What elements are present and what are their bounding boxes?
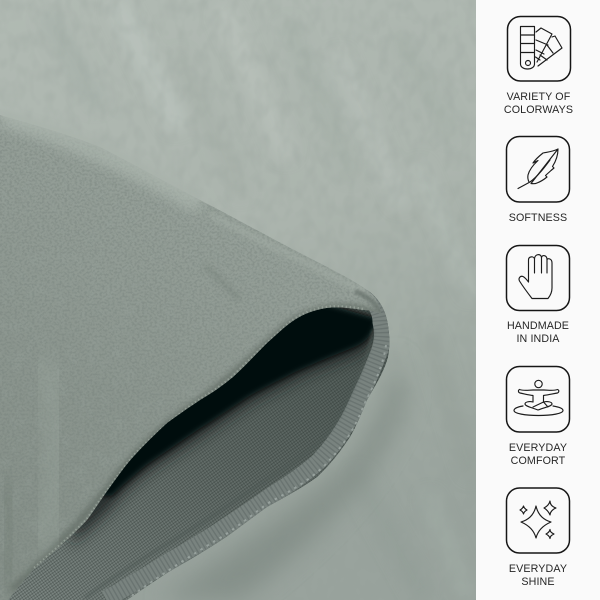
floor shadow beneath the roll — [178, 372, 411, 600]
icon: feather — [506, 136, 570, 202]
feature: handmade in india — [506, 246, 570, 345]
lip shadow along the opening — [12, 307, 378, 590]
fuzzy lip fringe — [33, 306, 363, 569]
label: softness: SOFTNESS — [509, 212, 567, 224]
icon: sparkling stars — [506, 488, 570, 553]
rolled rug top surface — [0, 110, 385, 600]
icon: colour swatch fan — [508, 16, 570, 81]
icon: raised hand — [506, 246, 570, 310]
feature: everyday shine — [506, 488, 570, 588]
dark opening shadow — [70, 300, 376, 545]
soft highlight along the top edge — [0, 118, 200, 206]
feature: variety of colorways — [504, 16, 573, 116]
label: handmade in india: IN INDIA — [516, 333, 560, 345]
label: variety of colorways: COLORWAYS — [504, 104, 573, 116]
label: everyday shine: EVERYDAY — [509, 563, 567, 575]
floor mottled streaks — [120, 14, 178, 121]
hem band — [106, 296, 382, 599]
rug floor background — [0, 0, 476, 600]
label: everyday comfort: COMFORT — [511, 455, 566, 467]
rolled rug underside with hem — [0, 285, 400, 600]
broad tonal patches — [42, 380, 59, 532]
label: handmade in india: HANDMADE — [507, 320, 569, 332]
label: variety of colorways: VARIETY OF — [507, 91, 570, 103]
soft out-of-focus top edge of the roll — [0, 113, 200, 198]
floor texture — [160, 96, 161, 97]
feature: everyday comfort — [506, 366, 570, 467]
label: everyday shine: SHINE — [521, 576, 555, 588]
panel: rug photo — [0, 0, 476, 600]
label: everyday comfort: EVERYDAY — [509, 442, 567, 454]
icon: meditating figure — [506, 366, 570, 432]
feature: softness — [506, 136, 570, 224]
panel: feature sidebar — [476, 0, 600, 600]
